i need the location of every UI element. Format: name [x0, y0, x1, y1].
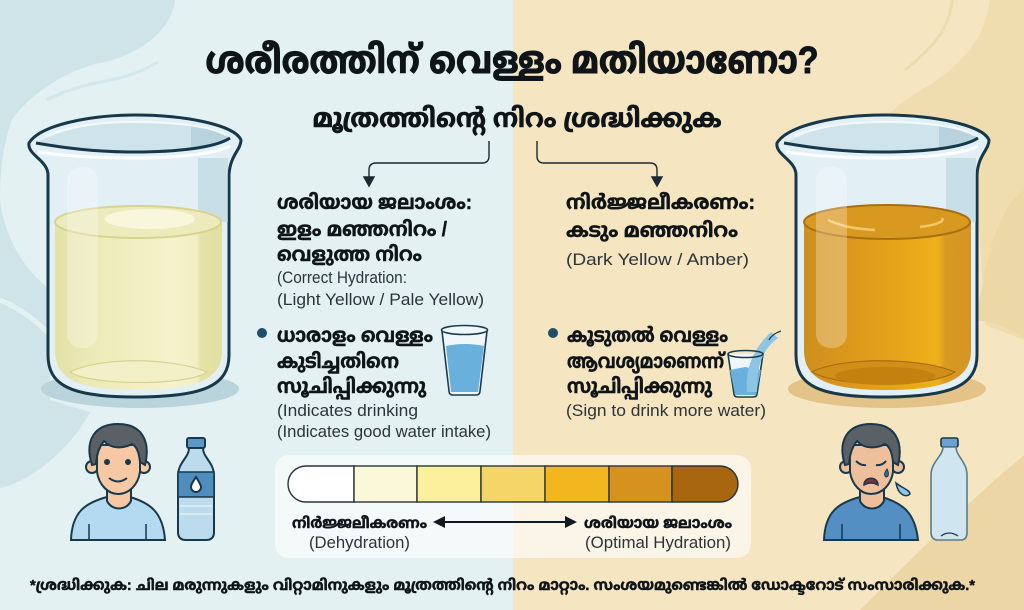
- scale label: dehydration: (Dehydration): [309, 533, 410, 552]
- icon: glass being filled: [728, 331, 781, 397]
- text block: correct hydration: ശരിയായ ജലാംശം:: [277, 192, 472, 214]
- text block: dehydration: കടും മഞ്ഞനിറം: [566, 220, 738, 242]
- text block: dehydration: (Dark Yellow / Amber): [566, 250, 749, 269]
- bullet text: good water intake: സൂചിപ്പിക്കുന്നു: [277, 376, 426, 400]
- scale label: dehydration: നിർജ്ജലീകരണം: [292, 514, 427, 532]
- bullet text: good water intake: (Indicates good water intake): [277, 422, 491, 441]
- text block: correct hydration: [277, 192, 484, 309]
- bullet text: good water intake: (Indicates drinking: [277, 401, 418, 420]
- arrow: to dehydration column: [537, 141, 662, 186]
- text block: dehydration: നിർജ്ജലീകരണം:: [566, 192, 755, 214]
- beaker: pale yellow urine: [29, 115, 241, 408]
- arrow: double-headed scale arrow: [433, 516, 577, 528]
- person: dehydrated, tired: [824, 424, 918, 540]
- scale label: optimal hydration: ശരിയായ ജലാംശം: [584, 515, 732, 532]
- subtitle: മൂത്രത്തിന്റെ നിറം ശ്രദ്ധിക്കുക: [312, 103, 722, 136]
- scale label: optimal hydration: (Optimal Hydration): [585, 533, 731, 552]
- bullet text: sign to drink more: ആവശ്യമാണെന്ന്: [567, 351, 726, 373]
- bullet text: sign to drink more: സൂചിപ്പിക്കുന്നു: [567, 376, 712, 400]
- panel: colour scale: [275, 455, 751, 558]
- bullet text: good water intake: കുടിച്ചതിനെ: [277, 351, 399, 374]
- title: ശരീരത്തിന് വെള്ളം മതിയാണോ?: [206, 40, 818, 82]
- chart: urine colour strip: [288, 466, 738, 502]
- icon: full glass of water: [442, 326, 488, 395]
- bullet text: good water intake: ധാരാളം വെള്ളം: [277, 325, 433, 347]
- text block: correct hydration: (Light Yellow / Pale Yellow): [277, 290, 484, 309]
- arrow: to hydration column: [364, 141, 489, 186]
- bullet text: sign to drink more: [548, 325, 766, 420]
- icon: empty water bottle: [931, 438, 967, 540]
- bullet text: good water intake: [257, 325, 491, 441]
- bullet text: sign to drink more: കൂടുതൽ വെള്ളം: [567, 325, 728, 347]
- text block: correct hydration: (Correct Hydration:: [277, 268, 407, 287]
- beaker: dark amber urine: [777, 115, 989, 408]
- footnote: *ശ്രദ്ധിക്കുക: ചില മരുന്നുകളും വിറ്റാമിനുകളും മൂത്രത്തിന്റെ നിറം മാറ്റാം. സംശയമുണ്ടെങ്കിൽ ഡോക്ടറോട് സംസാരിക്കുക.*: [30, 577, 975, 596]
- scale label: dehydration: [292, 514, 427, 552]
- person: healthy smiling: [71, 424, 165, 540]
- text block: correct hydration: ഇളം മഞ്ഞനിറം /: [277, 219, 447, 241]
- icon: full water bottle: [178, 438, 214, 540]
- scale label: optimal hydration: [584, 515, 732, 552]
- bullet text: sign to drink more: (Sign to drink more water): [566, 401, 766, 420]
- text block: correct hydration: വെളുത്ത നിറം: [277, 244, 422, 266]
- text block: dehydration: [566, 192, 755, 269]
